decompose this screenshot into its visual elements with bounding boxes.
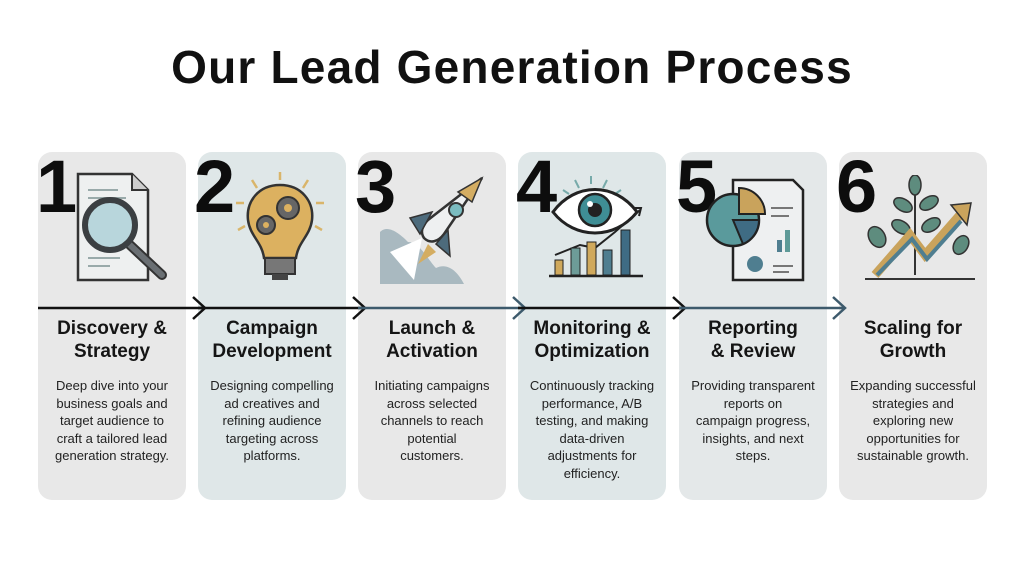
text: step 1: generation strategy.: [55, 448, 169, 463]
numbers: 1: [36, 145, 77, 228]
text: step 6: [850, 378, 976, 463]
text: step 5: reports on: [724, 396, 782, 410]
text: step 1: business goals and: [56, 396, 168, 410]
text: 4: [516, 145, 557, 228]
text: step 3: customers.: [400, 448, 464, 463]
text: step 3: across selected: [387, 396, 477, 410]
heading: step 2: Campaign: [226, 318, 318, 339]
text: step 4: [530, 378, 654, 480]
text: step 3: Initiating campaigns: [375, 378, 489, 393]
text: step 5: insights, and next: [702, 430, 804, 446]
panel: step 1: [38, 152, 186, 500]
text: step 1: [55, 378, 169, 463]
icon: report with pie chart: [706, 178, 804, 282]
heading: step 1: [57, 318, 167, 362]
text: step 4: Continuously tracking: [530, 378, 654, 393]
text: step 5: steps.: [736, 448, 770, 463]
text: step 4: adjustments for: [548, 448, 636, 463]
title: Our Lead Generation Process: [171, 41, 853, 93]
panel: step 2: [198, 152, 346, 500]
text: step 4: data-driven: [559, 430, 625, 446]
text: step 4: testing, and making: [536, 413, 648, 428]
heading: step 4: Optimization: [534, 341, 650, 362]
panel: step 6: [839, 152, 987, 500]
heading: step 6: Growth: [880, 341, 946, 362]
text: step 2: [210, 378, 334, 463]
heading: step 5: & Review: [711, 341, 795, 362]
text: step 6: opportunities for: [866, 430, 960, 446]
icon: eye and chart: [549, 176, 643, 278]
text: 5: [676, 145, 717, 228]
heading: step 3: Launch &: [389, 318, 475, 339]
heading: step 3: [386, 318, 478, 362]
panel: step 5: [679, 152, 827, 500]
heading: step 4: [533, 318, 651, 362]
text: step 2: Designing compelling: [210, 378, 334, 393]
heading: step 1: Strategy: [74, 341, 150, 362]
text: step 3: [375, 378, 489, 463]
heading: step 5: [708, 318, 798, 362]
text: step 6: exploring new: [873, 413, 953, 428]
icon: document magnifier: [76, 172, 167, 282]
heading: step 5: Reporting: [708, 318, 798, 339]
heading: step 2: Development: [212, 341, 332, 362]
text: step 5: Providing transparent: [691, 378, 815, 393]
heading: step 3: Activation: [386, 341, 478, 362]
heading: step 1: Discovery &: [57, 318, 167, 339]
icon: rocket: [380, 176, 484, 284]
text: step 3: potential: [407, 430, 457, 446]
text: step 5: campaign progress,: [696, 413, 810, 428]
text: step 6: strategies and: [872, 396, 954, 410]
text: 3: [355, 145, 396, 228]
text: step 2: ad creatives and: [224, 396, 320, 410]
text: step 2: refining audience: [222, 413, 322, 428]
text: step 1: Deep dive into your: [56, 378, 168, 393]
icon: growth plant arrow: [865, 175, 975, 280]
text: step 5: [691, 378, 815, 463]
text: step 3: channels to reach: [381, 413, 483, 428]
heading: step 4: Monitoring &: [533, 318, 651, 339]
panel: step 4: [518, 152, 666, 500]
text: 2: [194, 145, 235, 228]
panel: step 3: [358, 152, 506, 500]
heading: step 6: Scaling for: [864, 318, 962, 339]
heading: step 6: [864, 318, 962, 362]
text: step 1: craft a tailored lead: [57, 430, 167, 446]
heading: step 2: [212, 318, 332, 362]
text: step 6: sustainable growth.: [857, 448, 969, 463]
text: step 2: platforms.: [243, 448, 301, 463]
text: 6: [836, 145, 877, 228]
icon: lightbulb with gears: [236, 172, 324, 280]
text: step 4: efficiency.: [564, 466, 620, 480]
text: step 1: target audience to: [60, 413, 164, 428]
text: step 6: Expanding successful: [850, 378, 976, 393]
text: step 4: performance, A/B: [542, 396, 642, 410]
text: step 2: targeting across: [226, 430, 318, 446]
